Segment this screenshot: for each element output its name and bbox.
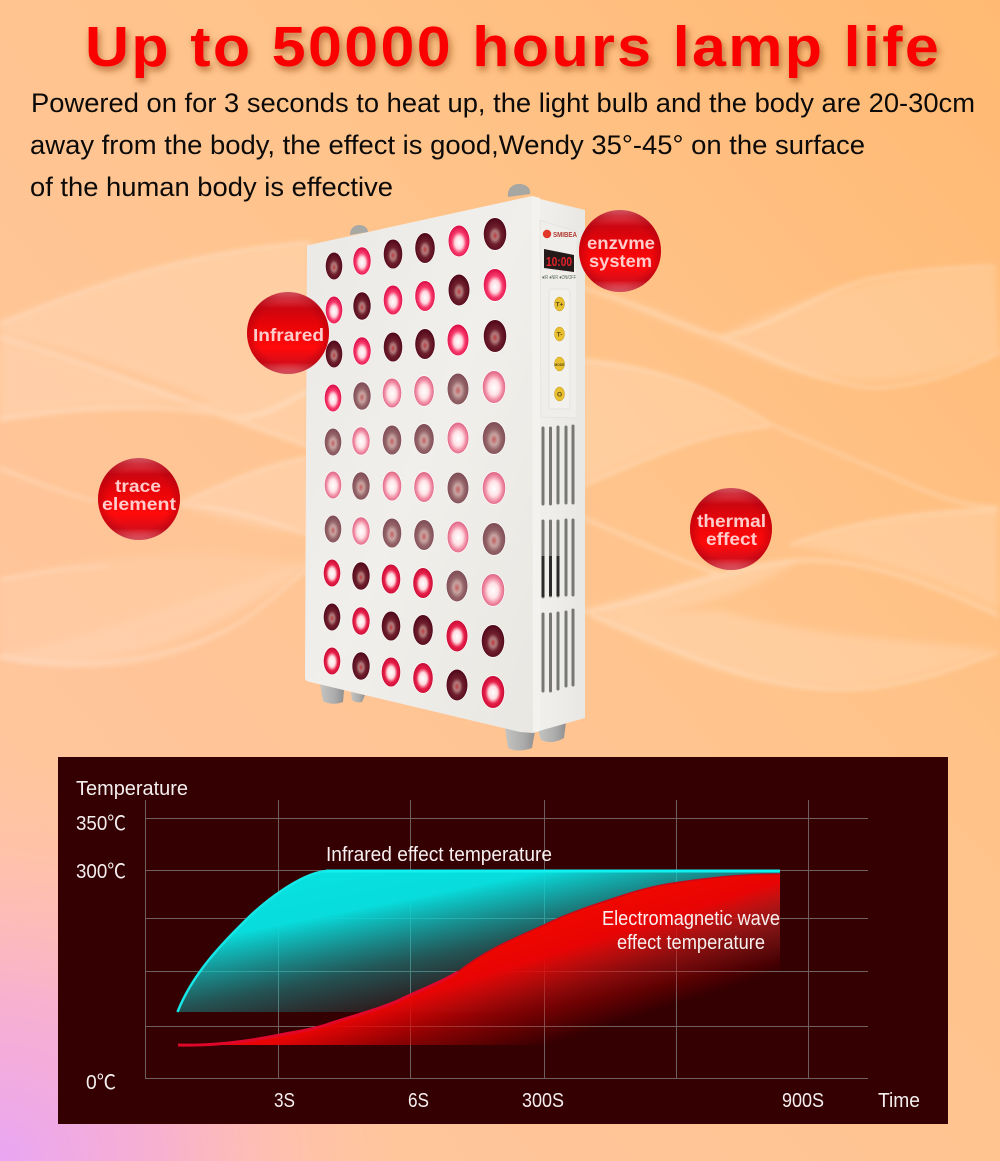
timer display <box>544 249 574 272</box>
indicator labels: ●IR ●NIR ●ON/OFF <box>542 275 576 281</box>
axis labels: 300℃ <box>76 861 126 883</box>
control panel: T+ <box>556 302 564 308</box>
control panel: O <box>557 392 562 398</box>
callout: trace element: trace <box>115 476 161 496</box>
LED bulb array <box>323 217 507 709</box>
callout: thermal effect: effect <box>706 529 757 549</box>
axis labels: 300S <box>522 1090 564 1112</box>
white smoke waves <box>0 241 1000 691</box>
row 6 <box>324 471 506 505</box>
intro text block: of the human body is effective <box>30 172 393 202</box>
timer display: 10:00 <box>546 254 572 269</box>
axis labels: 6S <box>408 1090 429 1112</box>
infrared curve area <box>178 871 780 1012</box>
row 5 <box>324 421 506 456</box>
row 7 <box>324 515 506 556</box>
callout: Infrared <box>247 292 329 374</box>
curve labels: Electromagnetic wave <box>602 908 780 930</box>
callout: thermal effect: thermal <box>697 511 766 531</box>
control panel: MODE <box>554 363 565 367</box>
axis labels: Temperature <box>76 778 188 800</box>
buttons <box>554 297 564 401</box>
callout: trace element: element <box>102 494 176 514</box>
top knobs <box>350 184 530 235</box>
axis labels: 3S <box>274 1090 295 1112</box>
red light therapy device <box>305 184 585 750</box>
electromagnetic wave curve area <box>178 874 780 1045</box>
row 3 <box>325 319 507 368</box>
side vents <box>543 426 573 691</box>
intro text block: Powered on for 3 seconds to heat up, the light bulb and the body are 20-30cm <box>31 88 975 118</box>
row 8 <box>323 559 505 607</box>
axis labels: Time <box>878 1090 920 1112</box>
control panel: T- <box>557 332 562 338</box>
curve labels <box>326 844 780 954</box>
logo: SMIBEA <box>553 230 577 239</box>
housing <box>532 197 585 733</box>
axis labels: 900S <box>782 1090 824 1112</box>
curve labels: effect temperature <box>617 932 765 954</box>
callout: trace element <box>98 458 180 540</box>
curve labels: Infrared effect temperature <box>326 844 552 866</box>
axis labels: 350℃ <box>76 813 126 835</box>
feet <box>320 684 566 750</box>
row 1 <box>325 217 507 280</box>
row 4 <box>324 370 506 412</box>
row 10 <box>323 647 505 709</box>
control panel <box>540 220 577 418</box>
callout: thermal effect <box>690 488 772 570</box>
callout: Infrared: Infrared <box>253 325 324 345</box>
row 2 <box>325 268 507 324</box>
intro text block: away from the body, the effect is good,Wendy 35°-45° on the surface <box>30 130 865 160</box>
intro text block <box>30 88 975 202</box>
callout: enzvme system: enzvme <box>587 233 655 253</box>
row 9 <box>323 603 505 658</box>
axis labels: 0℃ <box>86 1072 116 1094</box>
callout: enzvme system: system <box>589 251 652 271</box>
axis labels <box>76 778 920 1112</box>
callout: enzvme system <box>579 210 661 292</box>
logo <box>543 230 577 239</box>
button strip <box>549 289 570 409</box>
title: Up to 50000 hours lamp life <box>85 15 939 79</box>
panel: temperature chart <box>58 757 948 1124</box>
